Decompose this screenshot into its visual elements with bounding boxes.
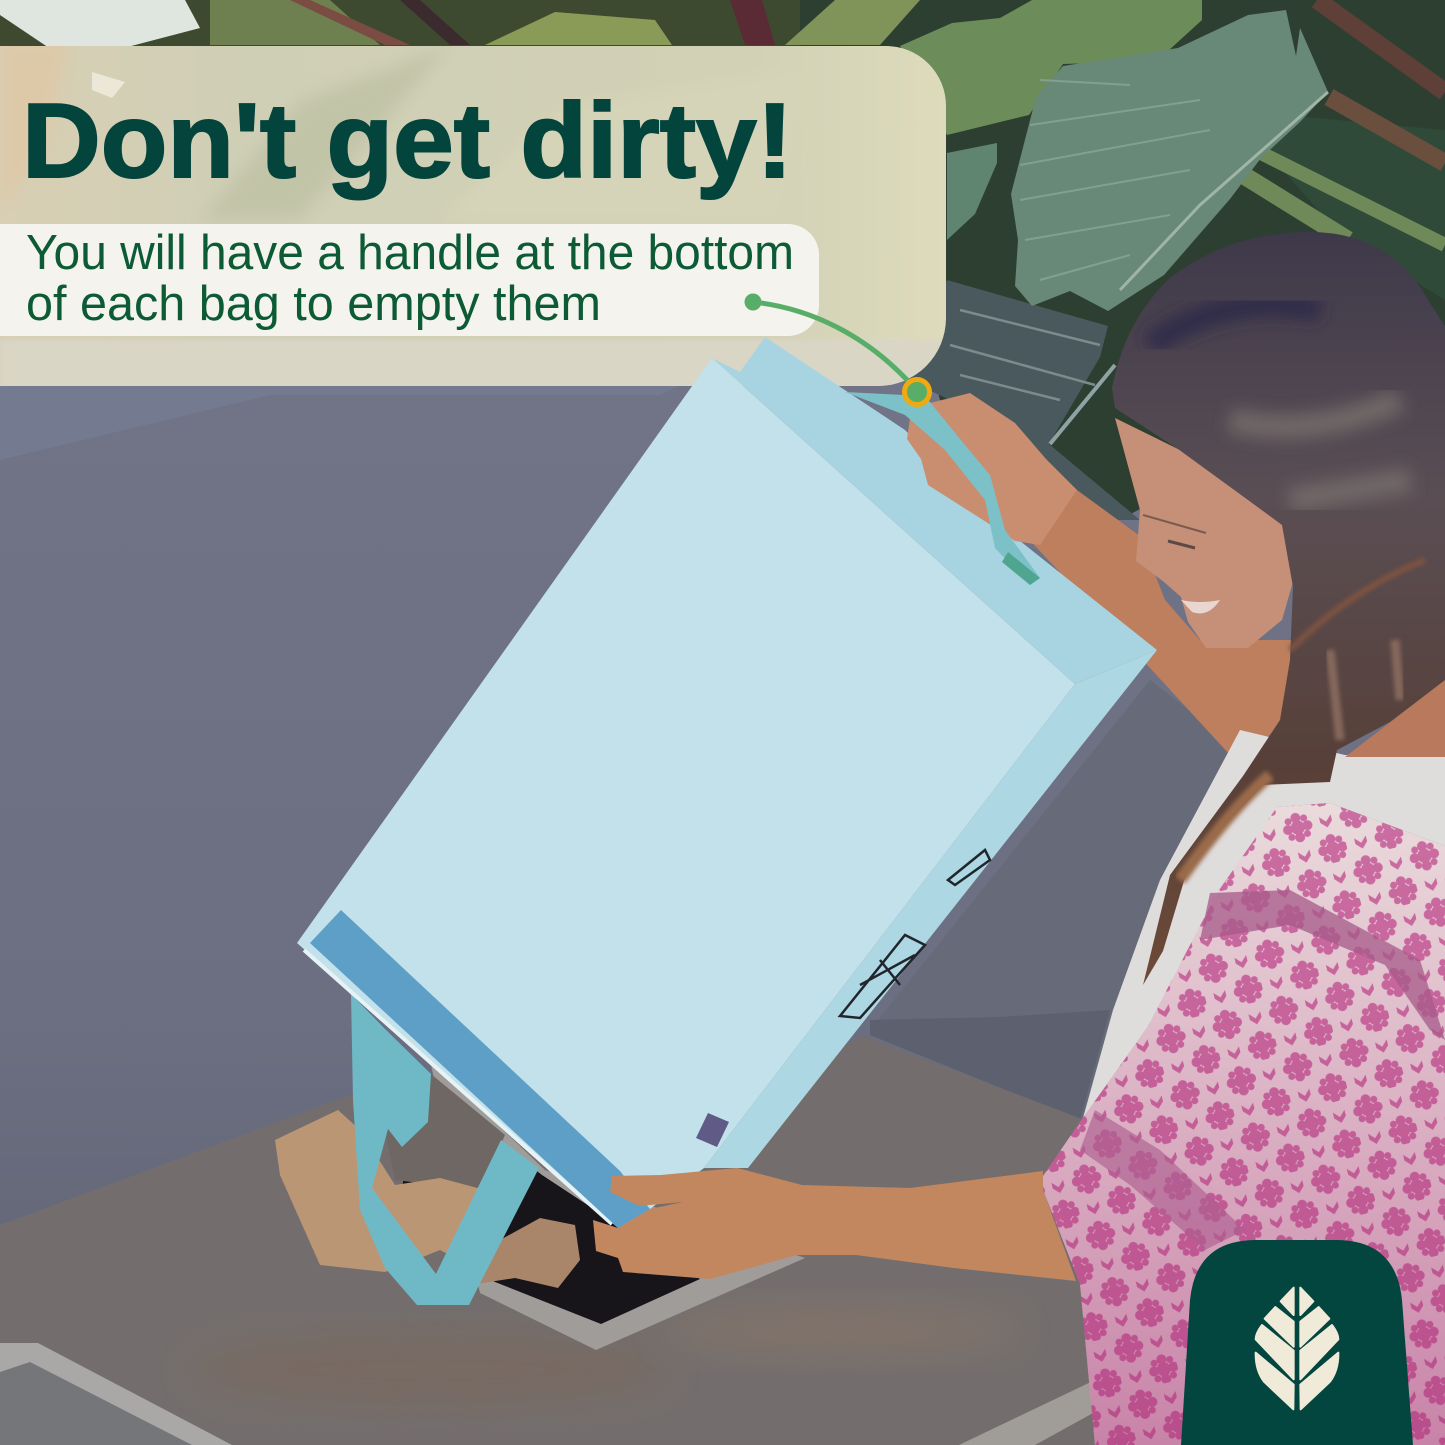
striped dark leaf bbox=[903, 280, 1140, 520]
raised arm bbox=[1020, 490, 1300, 755]
bag side panel bbox=[704, 650, 1157, 1168]
bag main face bbox=[297, 358, 1075, 1228]
woman bbox=[593, 232, 1445, 1445]
subtitle text: You will have a handle at the bottom bbox=[26, 226, 794, 280]
plant leaves bbox=[0, 0, 1445, 520]
stems bbox=[1240, 0, 1445, 245]
face bbox=[1115, 418, 1305, 648]
bag small tag bbox=[696, 1113, 729, 1147]
concrete counter bbox=[0, 1035, 1095, 1445]
bag blue base strip bbox=[310, 910, 650, 1228]
hair bbox=[1112, 232, 1445, 985]
white undershirt bbox=[1083, 730, 1445, 1118]
bag top flap bbox=[712, 337, 1157, 684]
bag side print bbox=[840, 850, 990, 1018]
trash opening bbox=[385, 1060, 805, 1350]
upper hand bbox=[907, 393, 1077, 545]
patterned blouse bbox=[1043, 803, 1445, 1445]
translucent heading panel bbox=[0, 40, 950, 390]
leaves along top edge bbox=[0, 0, 920, 62]
logo badge bbox=[1181, 1240, 1413, 1445]
green leaf bbox=[900, 0, 1202, 135]
callout connector bbox=[744, 294, 930, 404]
facial features bbox=[1143, 515, 1220, 614]
title: Don't get dirty! bbox=[22, 82, 793, 200]
top handle strap bbox=[845, 392, 1040, 585]
sink bbox=[0, 1343, 232, 1445]
crumpled paper bbox=[275, 1110, 580, 1288]
bag bottom handle bbox=[351, 994, 539, 1305]
large veined leaf bbox=[1011, 10, 1328, 311]
blue bag bbox=[297, 337, 1157, 1228]
plant background bbox=[0, 0, 1445, 520]
subtitle text bbox=[26, 226, 794, 331]
neck bbox=[1345, 680, 1445, 757]
lower arm and hand bbox=[593, 1168, 1076, 1281]
subtitle strip bbox=[0, 224, 819, 336]
small leaf bbox=[947, 143, 997, 240]
subtitle text: of each bag to empty them bbox=[26, 277, 601, 331]
icon: leaf bbox=[1256, 1288, 1338, 1409]
